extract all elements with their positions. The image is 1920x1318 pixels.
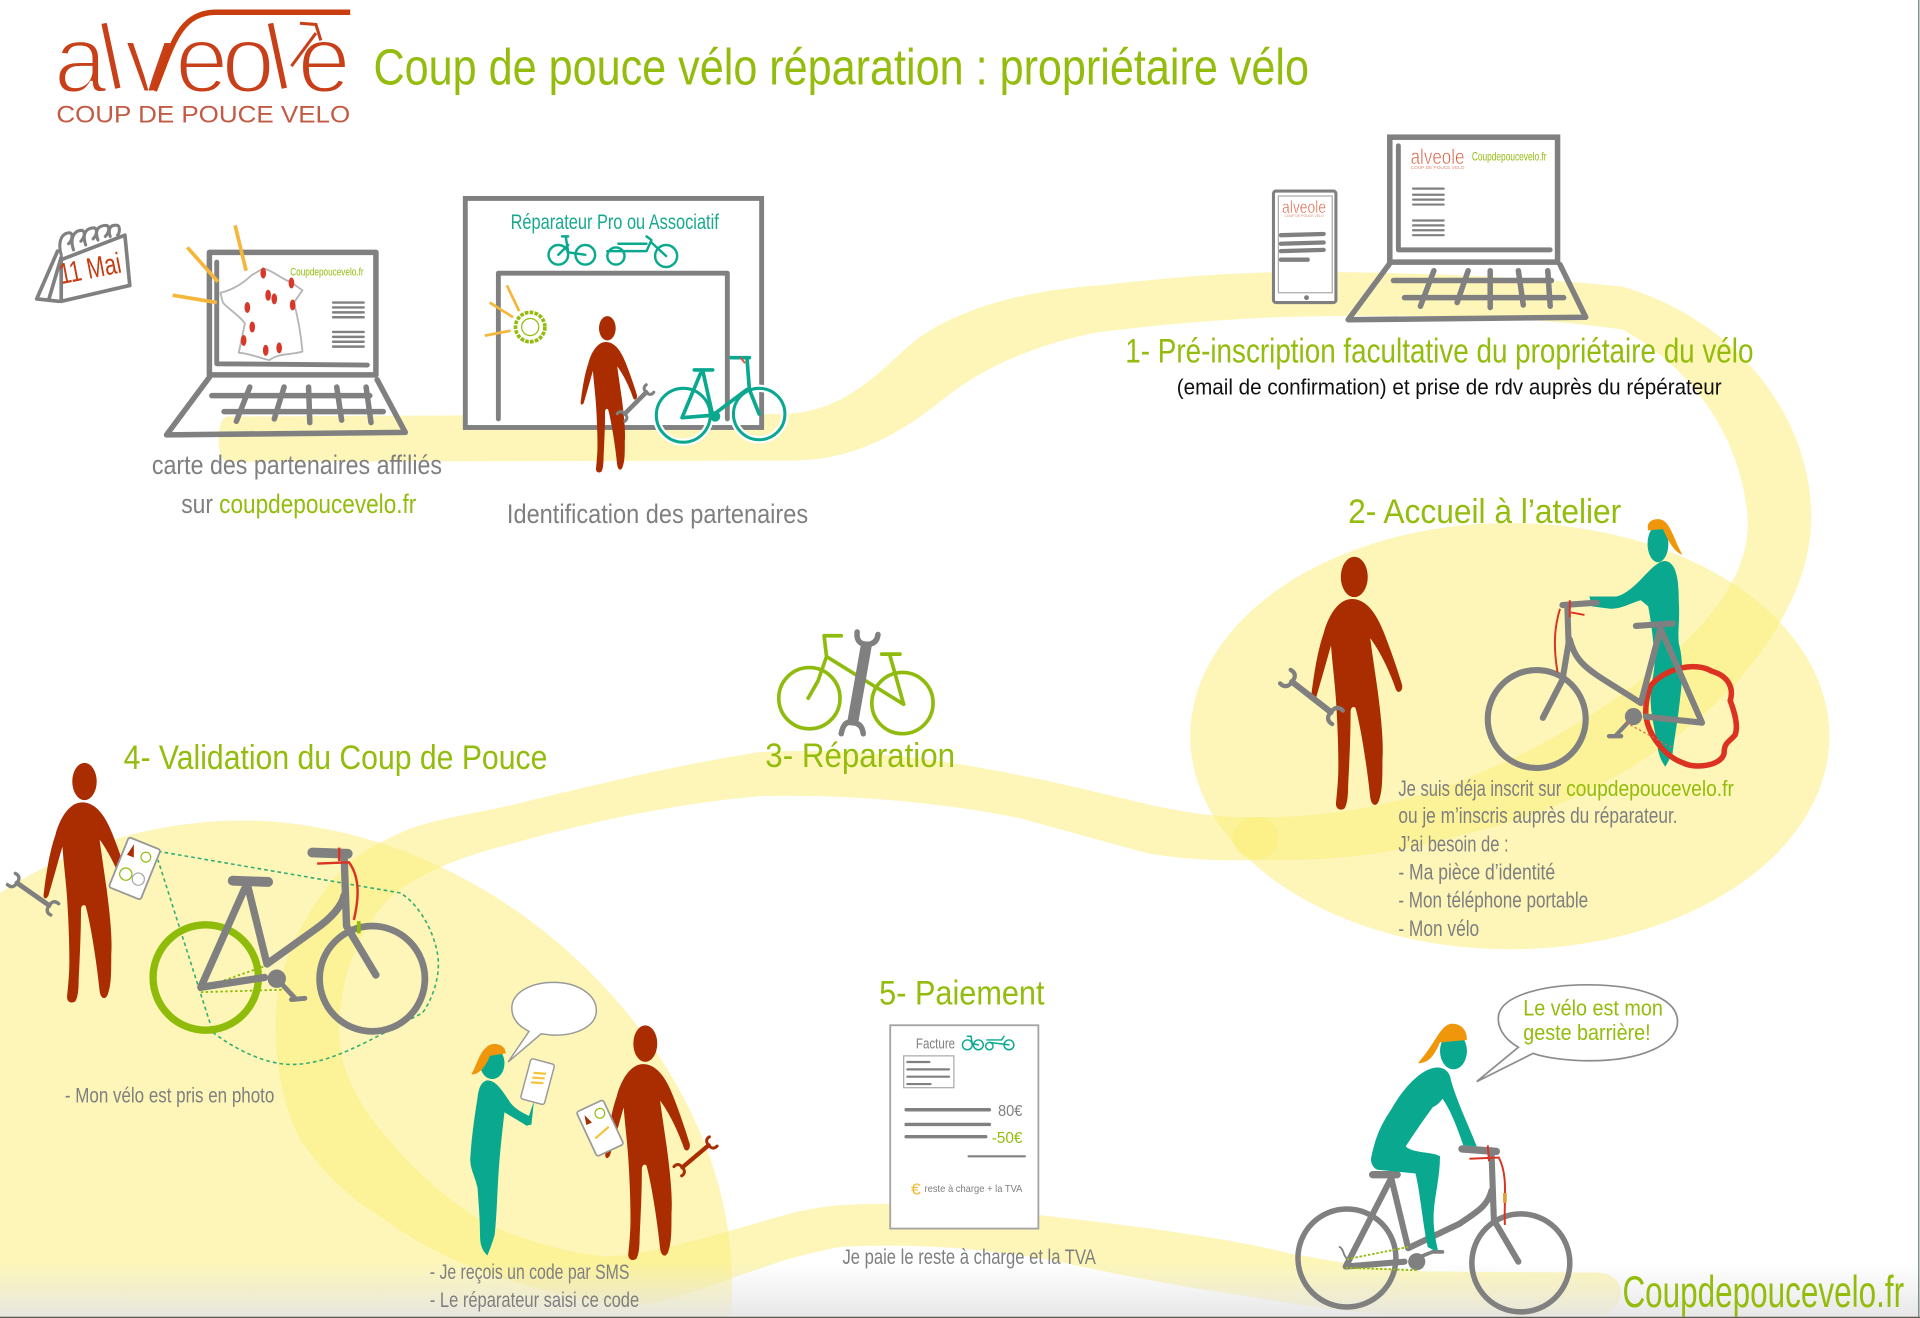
caption: identification: Identification des partenaires xyxy=(507,499,808,529)
text: step 2 details: - Ma pièce d’identité xyxy=(1398,859,1555,884)
icon: bike with green rear wheel xyxy=(153,848,425,1031)
icon: wrench at the shop xyxy=(617,385,654,421)
invoice: € xyxy=(911,1181,921,1198)
invoice: -50€ xyxy=(992,1130,1023,1147)
icon: laptop with website: COUP DE POUCE VELO xyxy=(1411,165,1465,170)
icon: repair shop xyxy=(465,198,762,427)
icon: bike with red rear wheel xyxy=(1488,600,1736,768)
yellow path: from step 2 to the finish xyxy=(276,751,1621,1316)
icon: tablet with code xyxy=(576,1100,624,1157)
caption: payment: Je paie le reste à charge et la TVA xyxy=(842,1246,1096,1269)
partner pins xyxy=(241,268,295,356)
person: repairer at the shop xyxy=(581,316,637,473)
badge rays xyxy=(485,285,519,336)
invoice: 80€ xyxy=(998,1103,1023,1120)
person: owner, step 2 xyxy=(1589,519,1682,767)
icon: wrench, step 2 xyxy=(1280,670,1343,724)
icon: laptop with website xyxy=(1348,137,1586,320)
text: step 2 details: - Mon vélo xyxy=(1398,916,1479,941)
text: SMS code xyxy=(430,1261,639,1312)
title: Coup de pouce vélo réparation : propriétaire vélo xyxy=(373,38,1309,96)
label badge xyxy=(516,312,545,342)
caption: partners map: sur xyxy=(181,489,213,519)
speech bubble: SMS xyxy=(508,982,596,1062)
text: step 1 details: (email de confirmation) et prise de rdv auprès du répérateur xyxy=(1177,374,1722,399)
rider xyxy=(1440,1033,1467,1069)
icon: laptop with map of partners xyxy=(167,225,405,435)
text: step 2 details: - Mon téléphone portable xyxy=(1398,888,1588,913)
person: repairer photographing the bike xyxy=(44,763,130,1003)
map of France xyxy=(220,268,302,360)
icon: wrench, photo xyxy=(7,873,59,915)
icon: laptop with website: alveole xyxy=(1411,146,1464,169)
invoice: reste à charge + la TVA xyxy=(924,1184,1023,1195)
invoice xyxy=(890,1025,1038,1229)
text: step 2 details: ou je m’inscris auprès du réparateur. xyxy=(1398,803,1678,828)
heading: step 5: 5- Paiement xyxy=(879,974,1045,1012)
icon: red wrench xyxy=(674,1137,717,1176)
heading: step 4: 4- Validation du Coup de Pouce xyxy=(124,739,547,777)
icon: phone with website xyxy=(1273,191,1336,303)
icon: phone with bike photo xyxy=(109,837,161,900)
caption: partners map: coupdepoucevelo.fr xyxy=(219,489,416,519)
icon: calendar xyxy=(37,225,130,301)
invoice: Facture xyxy=(916,1037,955,1053)
icon: laptop with website: Coupdepoucevelo.fr xyxy=(1472,149,1547,163)
text: SMS code: - Je reçois un code par SMS xyxy=(430,1261,629,1284)
screen url: Coupdepoucevelo.fr xyxy=(290,267,364,279)
person: repairer with tablet xyxy=(605,1025,690,1260)
calendar date: 11 Mai xyxy=(56,247,124,291)
caption: partners map: carte des partenaires affiliés xyxy=(152,450,442,480)
icon: phone with website: COUP DE POUCE VELO xyxy=(1284,214,1324,218)
icon: phone with website: alveole xyxy=(1282,197,1326,217)
shop sign text: Réparateur Pro ou Associatif xyxy=(511,211,719,234)
heading: step 3: 3- Réparation xyxy=(765,737,955,775)
text: SMS code: - Le réparateur saisi ce code xyxy=(430,1289,639,1312)
heading: step 1: 1- Pré-inscription facultative du propriétaire du vélo xyxy=(1125,333,1753,371)
text: photo: - Mon vélo est pris en photo xyxy=(65,1084,274,1107)
speech bubble: rider: geste barrière! xyxy=(1523,1020,1651,1045)
icon: teal bike at the shop xyxy=(656,358,785,442)
person: repairer, step 2 xyxy=(1311,557,1402,810)
yellow path: from partners to step 2 xyxy=(219,272,1811,860)
heading: step 2: 2- Accueil à l’atelier xyxy=(1348,493,1621,531)
caption: partners map xyxy=(152,450,442,519)
bottom fade xyxy=(0,1262,1920,1318)
icon: rider on bike xyxy=(1298,1024,1570,1312)
text: step 2 details: Je suis déja inscrit sur xyxy=(1398,776,1561,801)
text: step 2 details: coupdepoucevelo.fr xyxy=(1566,776,1734,801)
bubble text: Le vélo est mon xyxy=(1523,995,1663,1020)
logo: alveole: COUP DE POUCE VELO xyxy=(56,101,350,128)
icon: repair bike and wrench xyxy=(779,632,933,734)
speech bubble: rider xyxy=(1477,985,1678,1082)
shop sign bikes xyxy=(549,236,677,267)
highlight rays xyxy=(173,225,246,303)
phone with code xyxy=(520,1058,555,1105)
photo frame dashes xyxy=(158,851,438,1064)
text: step 2 details: J’ai besoin de : xyxy=(1398,831,1509,856)
yellow circle: step 2 area xyxy=(1190,523,1829,949)
yellow area: step 4 xyxy=(0,821,732,1318)
person: owner with phone xyxy=(470,1044,555,1256)
logo: alveole: alveole xyxy=(54,4,351,113)
text: step 2 details xyxy=(1398,776,1734,941)
